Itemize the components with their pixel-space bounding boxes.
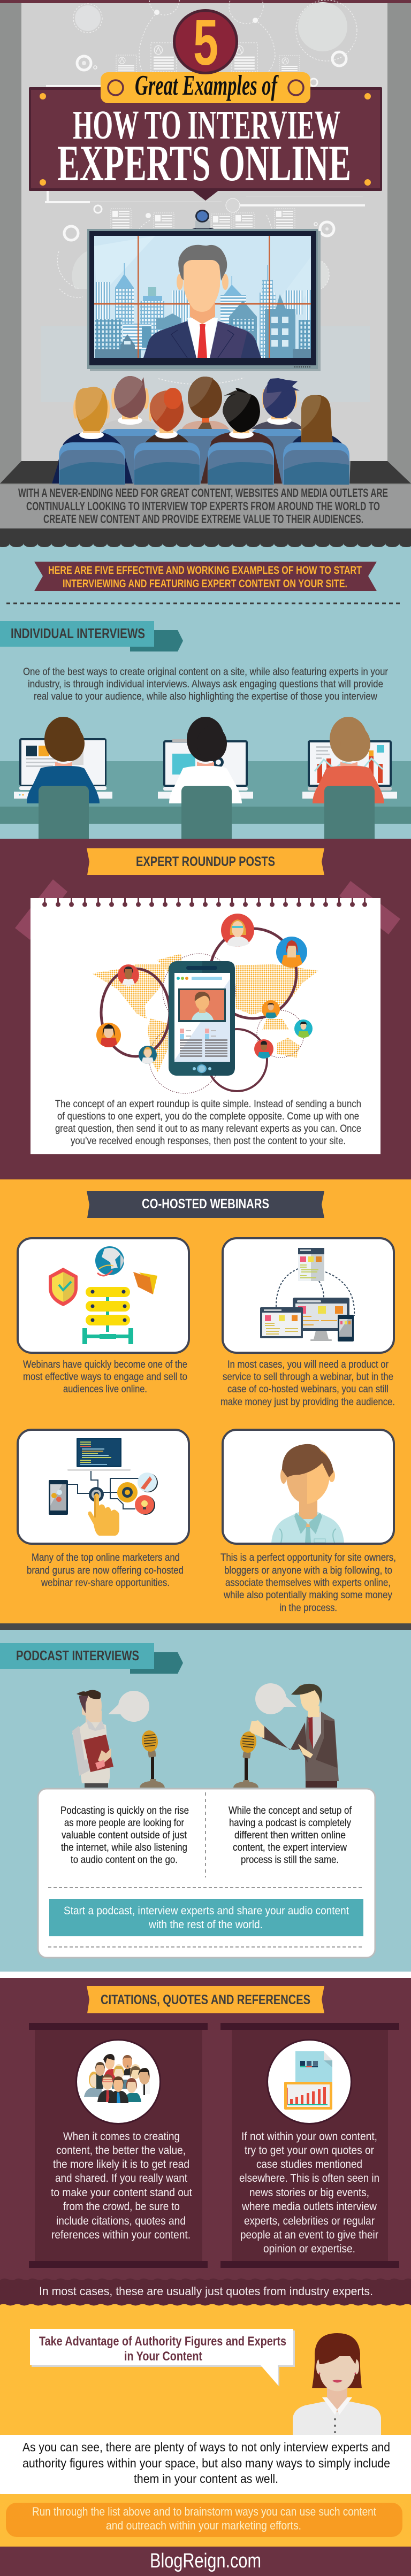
- heading: individual interviews: [0, 621, 183, 651]
- text: citations left: content, the better the value,: [56, 2144, 186, 2157]
- text: citations right: experts, celebrities or regular: [244, 2215, 375, 2227]
- heading: podcast interviews: [0, 1643, 183, 1674]
- card: site owner portrait: [223, 1430, 394, 1544]
- number badge: 5: [173, 6, 238, 79]
- wave band: most cases: In most cases, these are usually just quotes from industry experts.: [39, 2284, 373, 2298]
- panel: closing yellow section: [0, 2303, 411, 2547]
- title banner: [29, 87, 382, 201]
- figure: interviewer with book: [72, 1690, 113, 1788]
- audience: front row heads: [52, 387, 342, 484]
- text: podcasting on the rise: [60, 1805, 189, 1866]
- callout: brainstorm: [6, 2503, 402, 2537]
- text: podcast concept: While the concept and setup of: [229, 1805, 352, 1816]
- text: citations left: When it comes to creating: [63, 2130, 180, 2143]
- text: citations right: people at an event to give their: [240, 2229, 378, 2241]
- panel: citations section: [0, 1972, 411, 2283]
- panel: expert roundup section: [0, 839, 411, 1179]
- figure: woman presenter: [293, 2333, 381, 2435]
- text: rev-share opportunities: [27, 1552, 184, 1589]
- ribbon: expert roundup posts: EXPERT ROUNDUP POSTS: [136, 854, 275, 869]
- text band: conclusion: [0, 2435, 411, 2494]
- connection rings: [101, 929, 304, 1093]
- person at computer 2: [158, 717, 253, 839]
- text: podcasting on the rise: as more people are looking for: [64, 1817, 184, 1829]
- column: citations right: [220, 2023, 399, 2268]
- text: citations right: If not within your own content,: [241, 2130, 377, 2143]
- callout: start a podcast: Start a podcast, interview experts and share your audio content: [64, 1904, 349, 1917]
- text: expert roundup: [55, 1098, 361, 1147]
- text: podcast concept: process is still the same.: [241, 1854, 339, 1866]
- panel: co-hosted webinars section: [0, 1179, 411, 1623]
- callout: start a podcast: with the rest of the world.: [148, 1918, 263, 1931]
- text: citations right: elsewhere. This is often seen in: [239, 2172, 379, 2184]
- card: security and servers: [18, 1238, 189, 1353]
- text: citations left: the more likely it is to get read: [53, 2158, 189, 2171]
- text band: conclusion: them in your content as well.: [134, 2472, 278, 2486]
- subtitle pill: great examples of: [101, 70, 310, 103]
- text: podcast concept: different then written online: [234, 1829, 346, 1841]
- text: citations right: where media outlets interview: [241, 2201, 377, 2213]
- speech bubble: left: [108, 1691, 149, 1722]
- panel: hero stage: [0, 0, 411, 556]
- text: rev-share opportunities: Many of the top online marketers and: [32, 1552, 180, 1563]
- number badge: 5: 5: [193, 6, 218, 79]
- text: product or service: In most cases, you will need a product or: [227, 1359, 389, 1370]
- ribbon: citations, quotes and references: [87, 1986, 324, 2013]
- figure: expert in suit: [249, 1684, 339, 1788]
- text: citations right: try to get your own quotes or: [245, 2144, 374, 2157]
- footer: BlogReign.com: BlogReign.com: [150, 2550, 261, 2572]
- ribbon: citations, quotes and references: CITATIONS, QUOTES AND REFERENCES: [101, 1992, 310, 2007]
- speech bubble: authority figures: Take Advantage of Authority Figures and Experts: [39, 2334, 286, 2349]
- heading: podcast interviews: PODCAST INTERVIEWS: [16, 1647, 139, 1663]
- text: expert roundup: The concept of an expert roundup is quite simple. Instead of sending a bunch: [55, 1098, 361, 1110]
- callout: brainstorm: and outreach within your marketing efforts.: [106, 2519, 301, 2532]
- microphone: right: [233, 1730, 258, 1788]
- text: rev-share opportunities: webinar rev-share opportunities.: [41, 1577, 170, 1589]
- microphone: left: [140, 1729, 165, 1788]
- world map of dots: [92, 954, 318, 1072]
- text: product or service: case of co-hosted webinars, you can still: [227, 1383, 389, 1395]
- panel: podcast white card: [38, 1789, 375, 1958]
- text: citations right: [239, 2130, 379, 2255]
- text: podcasting on the rise: to audio content on the go.: [71, 1854, 178, 1866]
- ribbon: co-hosted webinars: CO-HOSTED WEBINARS: [142, 1197, 269, 1212]
- wave band: most cases: [0, 2278, 411, 2306]
- text: webinars engage: Webinars have quickly become one of the: [23, 1359, 187, 1370]
- icon: document and bar chart: [284, 2051, 332, 2110]
- text: citations right: opinion or expertise.: [263, 2243, 355, 2255]
- subtitle pill: great examples of: Great Examples of: [135, 70, 279, 101]
- icon: webcam: [188, 210, 218, 231]
- text: citations left: [51, 2130, 192, 2241]
- desk bands: [0, 761, 411, 824]
- heading: individual interviews: INDIVIDUAL INTERVIEWS: [11, 625, 145, 641]
- tape strips: [15, 879, 400, 940]
- icon: smartphone with expert profile: [169, 961, 235, 1076]
- text: citations left: from the crowd, be sure to: [63, 2201, 180, 2213]
- text: podcast concept: content, the expert interview: [233, 1842, 347, 1853]
- ribbon: five examples: [34, 562, 377, 591]
- column: citations left: [29, 2023, 208, 2268]
- text: podcast concept: having a podcast is completely: [229, 1817, 351, 1829]
- text: podcast concept: [229, 1805, 352, 1866]
- panel: notepad paper: [31, 898, 380, 1154]
- text: citations left: include citations, quotes and: [56, 2215, 186, 2227]
- text: perfect opportunity: [220, 1552, 396, 1614]
- expert avatars: [96, 914, 313, 1064]
- text: podcasting on the rise: Podcasting is quickly on the rise: [60, 1805, 189, 1816]
- text: citations left: references within your content.: [51, 2229, 191, 2241]
- scalloped curtain: [0, 528, 411, 548]
- text: product or service: [220, 1359, 395, 1408]
- text band: conclusion: authority figures within your space, but also many ways to simply include: [22, 2456, 390, 2470]
- text: expert roundup: you’ve received enough responses, then post the content to your site.: [71, 1135, 346, 1147]
- card: devices: [223, 1238, 394, 1353]
- teal section background: [0, 535, 411, 839]
- text: rev-share opportunities: brand gurus are now offering co-hosted: [27, 1565, 184, 1576]
- speech bubble: right: [255, 1683, 296, 1714]
- text: webinars engage: [23, 1359, 187, 1395]
- floor: [0, 461, 411, 484]
- speech bubble: authority figures: [30, 2329, 295, 2387]
- audience: back row seats and heads: [102, 376, 303, 484]
- text: expert roundup: great question, then send it out to as many relevant experts as you can. Once: [55, 1123, 361, 1134]
- audience: front row seats: [59, 442, 349, 485]
- text: webinars engage: most effective ways to engage and sell to: [23, 1371, 187, 1383]
- card: connected apps: [18, 1430, 189, 1544]
- text: podcasting on the rise: valuable content outside of just: [62, 1829, 187, 1841]
- person at computer 3: [302, 717, 397, 839]
- speech bubble: authority figures: in Your Content: [124, 2349, 202, 2364]
- text: citations right: news stories or big events,: [249, 2187, 369, 2199]
- text: citations right: case studies mentioned: [256, 2158, 362, 2171]
- footer: BlogReign.com: [0, 2547, 411, 2576]
- text: podcasting on the rise: the internet, while also listening: [61, 1842, 187, 1853]
- text: expert roundup: of questions to one expert, you do the complete opposite. Come up with one: [57, 1110, 359, 1122]
- screen: video interview monitor: [87, 229, 321, 371]
- intro text band: [0, 485, 411, 528]
- text: citations left: and shared. If you really want: [55, 2172, 187, 2184]
- person at computer 1: [14, 717, 112, 839]
- callout: start a podcast: [49, 1899, 363, 1936]
- text: webinars engage: audiences live online.: [63, 1383, 147, 1395]
- ribbon: co-hosted webinars: [87, 1191, 324, 1218]
- text: individual interviews: [23, 666, 388, 702]
- text: perfect opportunity: in the process.: [279, 1602, 337, 1614]
- ribbon: expert roundup posts: [87, 848, 324, 875]
- text: citations left: to make your content stand out: [51, 2187, 192, 2199]
- panel: podcast section: [0, 1623, 411, 1972]
- icon: crowd of experts: [84, 2054, 150, 2103]
